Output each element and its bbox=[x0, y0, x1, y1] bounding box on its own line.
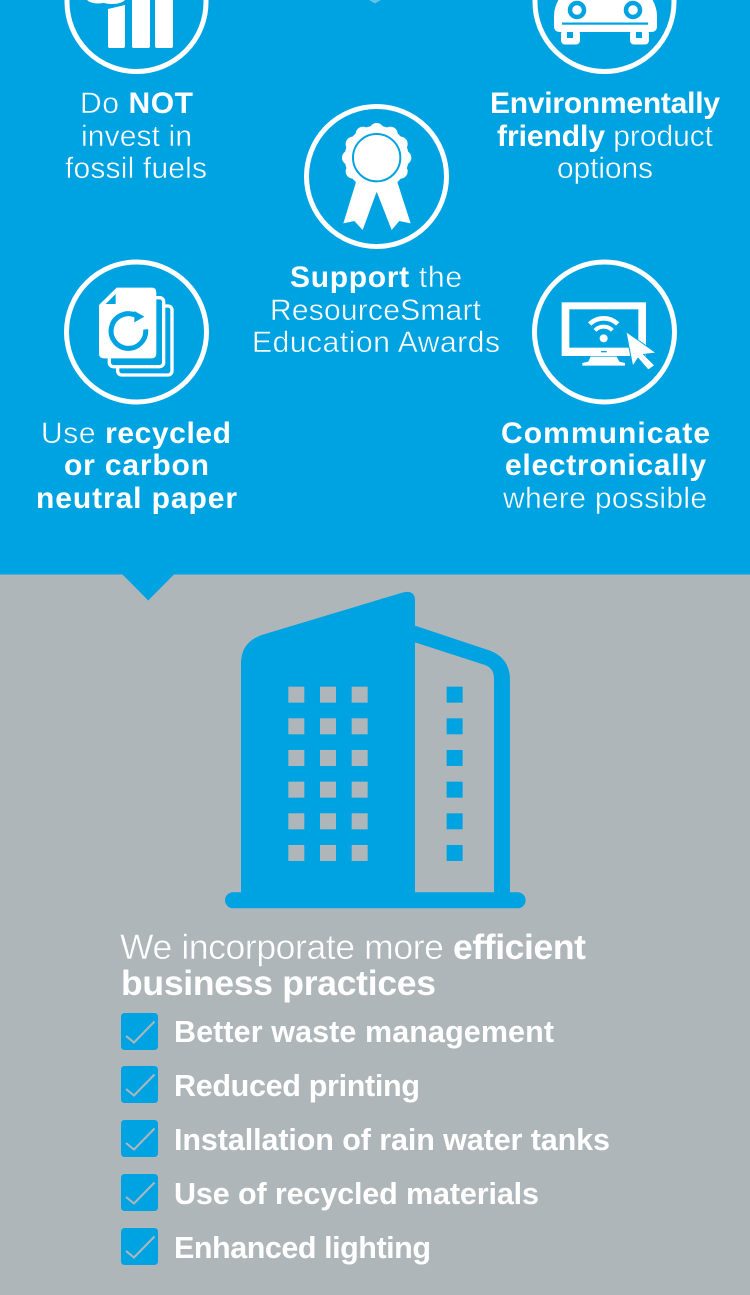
text: communicate electronically where possible: electronically bbox=[505, 449, 706, 482]
text: do not invest in fossil fuels bbox=[65, 87, 207, 185]
text: do not invest in fossil fuels: Do NOT bbox=[80, 87, 193, 120]
text: support the ResourceSmart Education Awards bbox=[252, 261, 500, 359]
text: communicate electronically where possible: where possible bbox=[502, 482, 707, 515]
checklist bbox=[121, 1013, 610, 1265]
text: environmentally friendly product options: friendly product bbox=[497, 120, 714, 153]
text: support the ResourceSmart Education Awards: Education Awards bbox=[252, 326, 500, 359]
heading: efficient business practices: business practices bbox=[121, 963, 436, 1003]
text: do not invest in fossil fuels: invest in bbox=[81, 120, 192, 153]
icon: award ribbon bbox=[306, 106, 446, 246]
heading: efficient business practices: We incorporate more efficient bbox=[120, 927, 586, 967]
pointer triangle bbox=[122, 574, 174, 600]
item: better waste management: Better waste management bbox=[174, 1015, 554, 1049]
panel: blue commitments bbox=[0, 0, 750, 575]
text: do not invest in fossil fuels: fossil fuels bbox=[65, 152, 207, 185]
text: communicate electronically where possible: Communicate bbox=[501, 417, 710, 450]
heading: efficient business practices bbox=[120, 927, 586, 1003]
text: support the ResourceSmart Education Awards: ResourceSmart bbox=[270, 294, 482, 327]
icon: recycled paper bbox=[66, 262, 206, 402]
icon: fossil fuel factory bbox=[67, 0, 206, 72]
text: use recycled or carbon neutral paper: Use recycled bbox=[41, 417, 231, 450]
text: use recycled or carbon neutral paper bbox=[36, 417, 237, 515]
icon: monitor with wifi and cursor bbox=[534, 262, 674, 402]
text: environmentally friendly product options: Environmentally bbox=[490, 87, 720, 120]
item: enhanced lighting: Enhanced lighting bbox=[174, 1231, 431, 1265]
item: use of recycled materials: Use of recycled materials bbox=[174, 1177, 539, 1211]
panel: grey efficient business practices bbox=[0, 574, 750, 1295]
icon: office building bbox=[225, 592, 526, 908]
item: installation of rain water tanks: Installation of rain water tanks bbox=[174, 1123, 610, 1157]
text: environmentally friendly product options bbox=[490, 87, 720, 185]
icon: car bbox=[535, 0, 674, 72]
text: use recycled or carbon neutral paper: neutral paper bbox=[36, 482, 237, 515]
text: use recycled or carbon neutral paper: or carbon bbox=[64, 449, 209, 482]
text: environmentally friendly product options: options bbox=[557, 152, 653, 185]
text: support the ResourceSmart Education Awards: Support the bbox=[290, 261, 462, 294]
item: reduced printing: Reduced printing bbox=[174, 1069, 420, 1103]
text: communicate electronically where possible bbox=[501, 417, 710, 515]
